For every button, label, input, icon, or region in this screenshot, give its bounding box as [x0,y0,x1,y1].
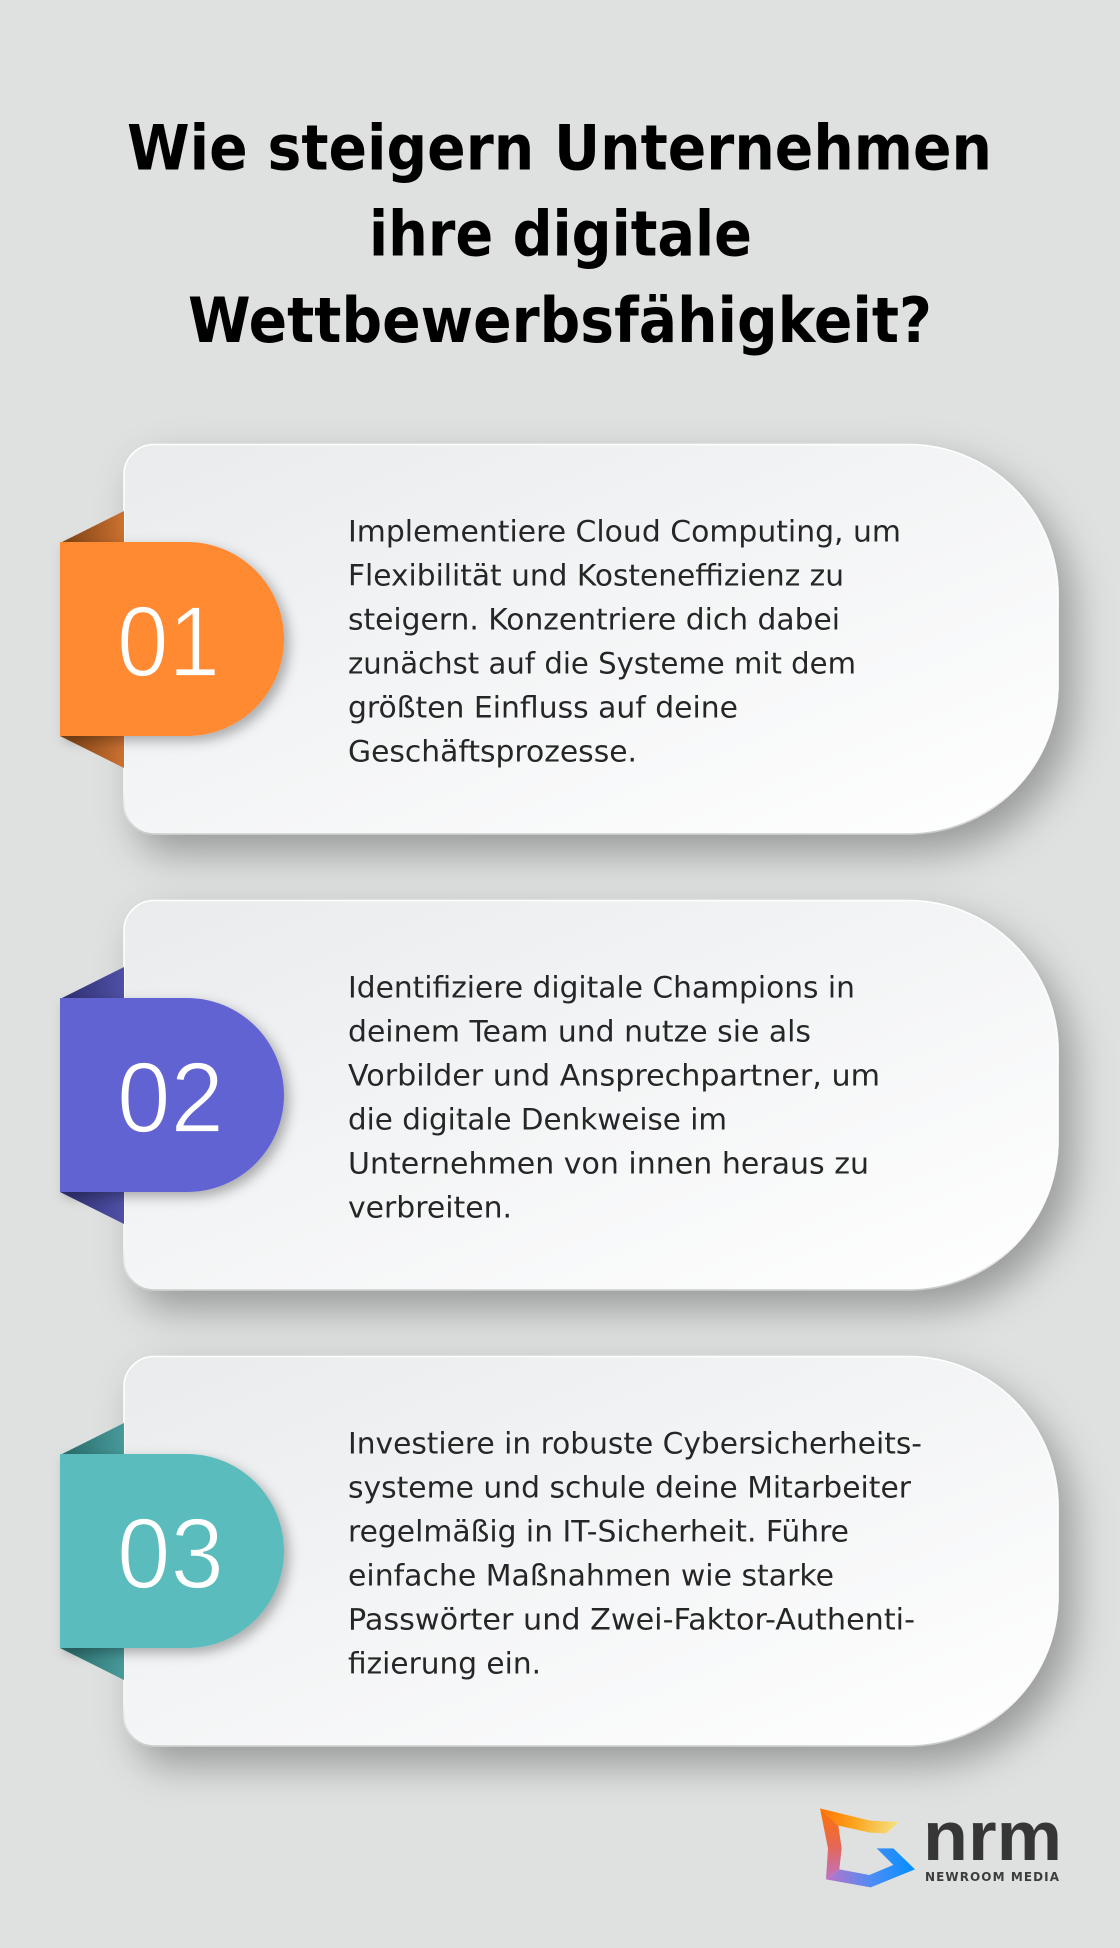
text 01: größten Einfluss auf deine [348,690,738,724]
text 01: Geschäftsprozesse. [348,734,637,768]
title: ihre digitale [369,198,752,270]
card 03 [124,1356,1058,1746]
text 01 [348,514,901,768]
ribbon folds 03 [60,1423,124,1680]
text 02: verbreiten. [348,1190,512,1224]
ribbon folds 02 [60,967,124,1224]
logo wordmark: nrm [923,1797,1062,1875]
text 01: Implementiere Cloud Computing, um [348,514,901,548]
text 02: Identifiziere digitale Champions in [348,970,855,1004]
number 03: 03 [117,1498,224,1610]
logo tagline: NEWROOM MEDIA [925,1870,1060,1884]
text 01: Flexibilität und Kosteneffizienz zu [348,558,844,592]
text 03 [348,1426,922,1680]
text 01: steigern. Konzentriere dich dabei [348,602,840,636]
ribbon folds 01 [60,511,124,768]
panel: step 01 [60,444,1058,834]
card 02 [124,900,1058,1290]
title [127,112,992,357]
card 01 [124,444,1058,834]
text 02: Unternehmen von innen heraus zu [348,1146,869,1180]
text 02: deinem Team und nutze sie als [348,1014,811,1048]
text 03: regelmäßig in IT-Sicherheit. Führe [348,1514,849,1548]
number 02: 02 [117,1042,224,1154]
panel: step 02 [60,900,1058,1290]
badge 01 [60,542,284,736]
text 03: Investiere in robuste Cybersicherheits- [348,1426,922,1460]
text 02: die digitale Denkweise im [348,1102,727,1136]
icon: logo mark [820,1808,915,1887]
number 01: 01 [117,586,220,698]
text 03: einfache Maßnahmen wie starke [348,1558,834,1592]
title: Wettbewerbsfähigkeit? [188,284,932,357]
logo: newroom media [820,1797,1062,1887]
text 03: systeme und schule deine Mitarbeiter [348,1470,912,1504]
badge 03 [60,1454,284,1648]
title: Wie steigern Unternehmen [127,112,992,184]
text 03: Passwörter und Zwei-Faktor-Authenti- [348,1602,915,1636]
text 02: Vorbilder und Ansprechpartner, um [348,1058,880,1092]
text 02 [348,970,880,1224]
panel: step 03 [60,1356,1058,1746]
text 01: zunächst auf die Systeme mit dem [348,646,856,680]
text 03: fizierung ein. [348,1646,541,1680]
badge 02 [60,998,284,1192]
